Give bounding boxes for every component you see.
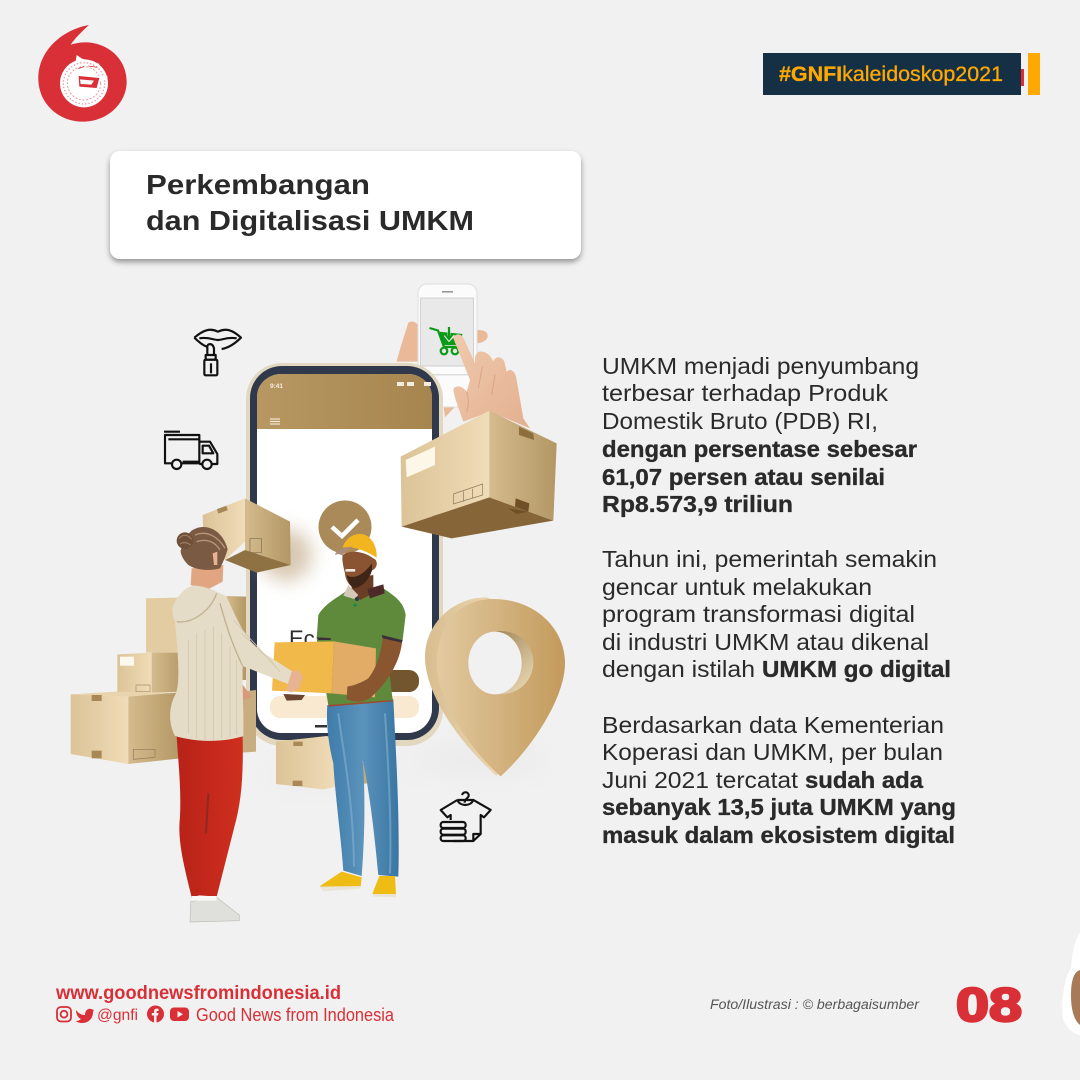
large smartphone <box>246 363 443 746</box>
delivery man <box>317 534 406 897</box>
sweater <box>170 585 293 741</box>
paragraph 3: Berdasarkan data Kementerian <box>602 712 944 738</box>
paragraph 3: sudah ada <box>805 767 924 793</box>
title card: Perkembangan <box>146 169 370 200</box>
icon: facebook <box>147 1006 164 1022</box>
paragraph 2: program transformasi digital <box>602 601 915 627</box>
icon: folded shirt on hanger <box>441 792 491 841</box>
paragraph 1: UMKM menjadi penyumbang <box>602 353 919 379</box>
title card <box>110 151 581 259</box>
paragraph 2: UMKM go digital <box>762 656 951 682</box>
hair <box>181 527 228 570</box>
forearm and hand <box>347 638 402 702</box>
paragraph 3: Koperasi dan UMKM, per bulan <box>602 739 943 765</box>
shoes <box>320 872 362 889</box>
paragraph 3: sebanyak 13,5 juta UMKM yang <box>602 794 956 820</box>
cropped sticker at right edge <box>1062 933 1080 1035</box>
title card: dan Digitalisasi UMKM <box>146 205 474 236</box>
logo: GNFI red six with garuda G <box>38 25 127 122</box>
parcel in hands <box>272 638 402 702</box>
paragraph 2: di industri UMKM atau dikenal <box>602 629 929 655</box>
footer: website and social handles: Good News from Indonesia <box>196 1005 395 1025</box>
paragraph 3: masuk dalam ekosistem digital <box>602 822 955 848</box>
hand pressing phone <box>453 334 530 428</box>
trousers <box>177 736 243 897</box>
jeans <box>327 699 399 877</box>
paragraph 2: gencar untuk melakukan <box>602 574 872 600</box>
hand behind <box>242 683 252 701</box>
photo credit: Foto/Ilustrasi : © berbagaisumber <box>710 997 920 1012</box>
neck <box>191 565 223 590</box>
hashtag badge: #GNFIkaleidoskop2021 <box>779 63 1003 86</box>
floor shadows <box>260 746 550 785</box>
location pin <box>425 597 565 776</box>
icon: green shopping cart <box>430 327 461 354</box>
footer: website and social handles: @gnfi <box>97 1007 138 1024</box>
icon: youtube <box>170 1008 189 1021</box>
check badge <box>318 500 372 554</box>
icon: lips and lipstick <box>194 330 241 375</box>
paragraph 1: terbesar terhadap Produk <box>602 380 888 406</box>
shirt <box>317 588 406 705</box>
large smartphone: 9:41 <box>270 383 283 390</box>
large smartphone: Ec <box>289 626 315 651</box>
shoes <box>190 897 239 922</box>
icon: instagram <box>57 1007 71 1022</box>
icon: twitter <box>76 1009 94 1023</box>
hand <box>287 670 303 692</box>
floating box large <box>401 411 557 538</box>
paragraph 1: Rp8.573,9 triliun <box>602 491 793 517</box>
paragraph 1: dengan persentase sebesar <box>602 436 917 462</box>
small phone held by hand <box>397 284 488 417</box>
paragraph 1: 61,07 persen atau senilai <box>602 464 885 490</box>
icon: delivery truck <box>164 432 217 469</box>
paragraph 2 <box>602 546 951 682</box>
paragraph 1: Domestik Bruto (PDB) RI, <box>602 408 878 434</box>
floating box small <box>203 498 291 573</box>
illustration: e-commerce delivery scene <box>71 284 565 922</box>
footer: website and social handles <box>55 983 395 1025</box>
head and cap <box>335 534 385 607</box>
paragraph 2: dengan istilah <box>602 656 755 682</box>
paragraph 2: Tahun ini, pemerintah semakin <box>602 546 937 572</box>
paragraph 3: Juni 2021 tercatat <box>602 767 798 793</box>
hashtag badge <box>763 53 1040 95</box>
cardboard box stack <box>71 596 367 789</box>
footer: website and social handles: www.goodnewsfromindonesia.id <box>55 983 341 1004</box>
paragraph 1 <box>602 353 919 517</box>
page number: 08 <box>956 978 1022 1031</box>
woman customer <box>170 527 303 922</box>
paragraph 3 <box>602 712 956 848</box>
